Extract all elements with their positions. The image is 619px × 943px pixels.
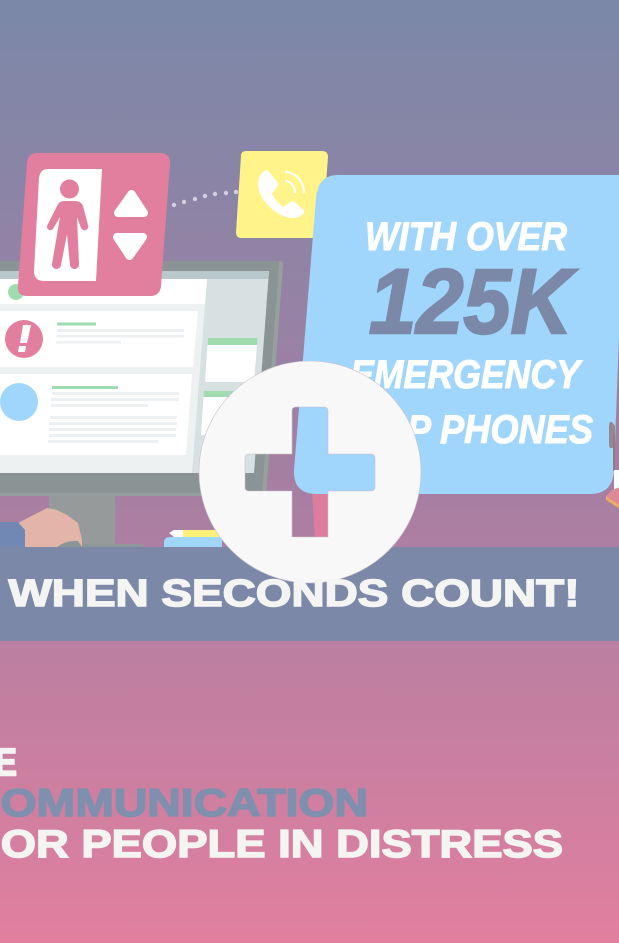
icon: yellow phone tile <box>236 151 328 238</box>
pencil and book <box>164 530 223 547</box>
heading: when seconds count: WHEN SECONDS COUNT! <box>8 573 580 615</box>
monitor screen <box>0 271 269 473</box>
desk items at right edge <box>606 422 619 509</box>
window panel <box>0 279 207 473</box>
blue circle card <box>0 374 192 455</box>
monitor frame <box>0 261 283 496</box>
text: closing statement <box>0 742 563 866</box>
side panel cells <box>201 338 258 435</box>
arrow: elevator up <box>118 194 144 213</box>
heading: with over: WITH OVER <box>365 215 567 259</box>
icon: elevator tile <box>18 153 170 296</box>
dotted connector line <box>172 190 238 207</box>
text: emergency help phones <box>335 353 593 452</box>
monitor <box>0 261 283 547</box>
arrow: elevator down <box>117 237 143 256</box>
pink shape behind cross <box>312 490 330 540</box>
monitor stand <box>49 496 143 547</box>
text: emergency help phones: HELP <box>335 408 431 452</box>
text: emergency help phones: PHONES <box>440 408 593 452</box>
icon: medical cross badge <box>199 361 421 583</box>
panel: blue emergency phones callout <box>294 175 619 494</box>
number: 125K: 125K <box>369 251 578 353</box>
alert card <box>0 311 198 367</box>
hand on mouse <box>0 508 82 547</box>
banner bar <box>0 547 619 641</box>
person figure <box>47 180 88 269</box>
text: emergency help phones: EMERGENCY <box>350 353 583 397</box>
